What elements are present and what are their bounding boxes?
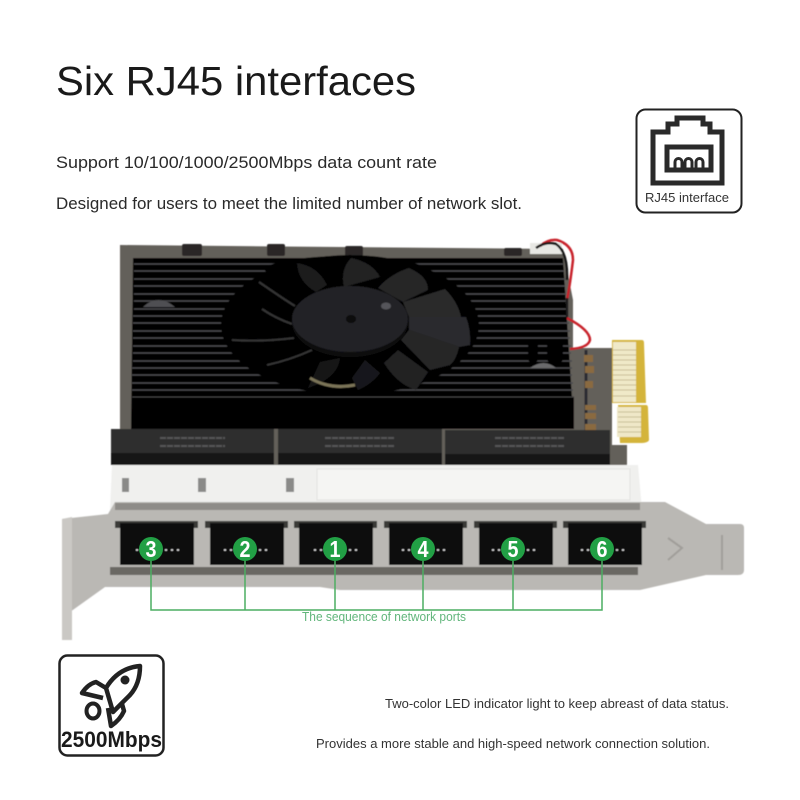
heatsink	[131, 258, 574, 429]
pcb components	[182, 244, 596, 430]
port 1	[294, 521, 377, 565]
port 4	[384, 521, 467, 565]
callout label: The sequence of network ports	[302, 609, 466, 624]
heatsink fins	[132, 264, 573, 390]
port 5	[474, 521, 557, 565]
number 3: 3	[146, 536, 156, 562]
fan	[221, 255, 479, 395]
transformers	[111, 429, 610, 466]
wires	[540, 240, 573, 300]
number 6: 6	[596, 536, 608, 562]
number 1	[323, 536, 347, 562]
number 5	[501, 536, 525, 562]
connector gold fingers	[612, 340, 649, 443]
port 6	[563, 521, 646, 565]
number 1: 1	[330, 536, 341, 562]
icon: RJ45 interface	[636, 110, 742, 212]
text: data rate: Support 10/100/1000/2500Mbps data count rate	[56, 154, 437, 172]
metal cage	[110, 465, 642, 510]
port 2	[205, 521, 288, 565]
icon: rocket 2500Mbps: 2500Mbps	[61, 727, 162, 752]
text: connection note: Provides a more stable and high-speed network connection solution.	[316, 737, 710, 751]
icon: RJ45 interface: RJ45 interface	[645, 191, 729, 205]
title: Six RJ45 interfaces	[56, 58, 416, 104]
power connector	[530, 243, 562, 254]
pcb board	[111, 245, 627, 465]
number 4: 4	[418, 536, 429, 562]
bracket engraving	[668, 535, 722, 570]
number 5: 5	[508, 536, 519, 562]
bracket	[62, 502, 744, 640]
port sequence callout	[139, 536, 614, 624]
icon: rocket 2500Mbps	[60, 656, 164, 756]
number 2	[233, 536, 257, 562]
text: design note: Designed for users to meet the limited number of network slot.	[56, 195, 522, 213]
number 3	[139, 536, 163, 562]
text: LED note: Two-color LED indicator light to keep abreast of data status.	[385, 697, 729, 711]
number 6	[590, 536, 614, 562]
number 2: 2	[240, 536, 250, 562]
heatsink notches	[143, 300, 175, 307]
network card photo	[62, 240, 744, 640]
number 4	[411, 536, 435, 562]
ports	[115, 521, 646, 565]
port 3	[115, 521, 198, 565]
fan hub	[292, 287, 408, 357]
